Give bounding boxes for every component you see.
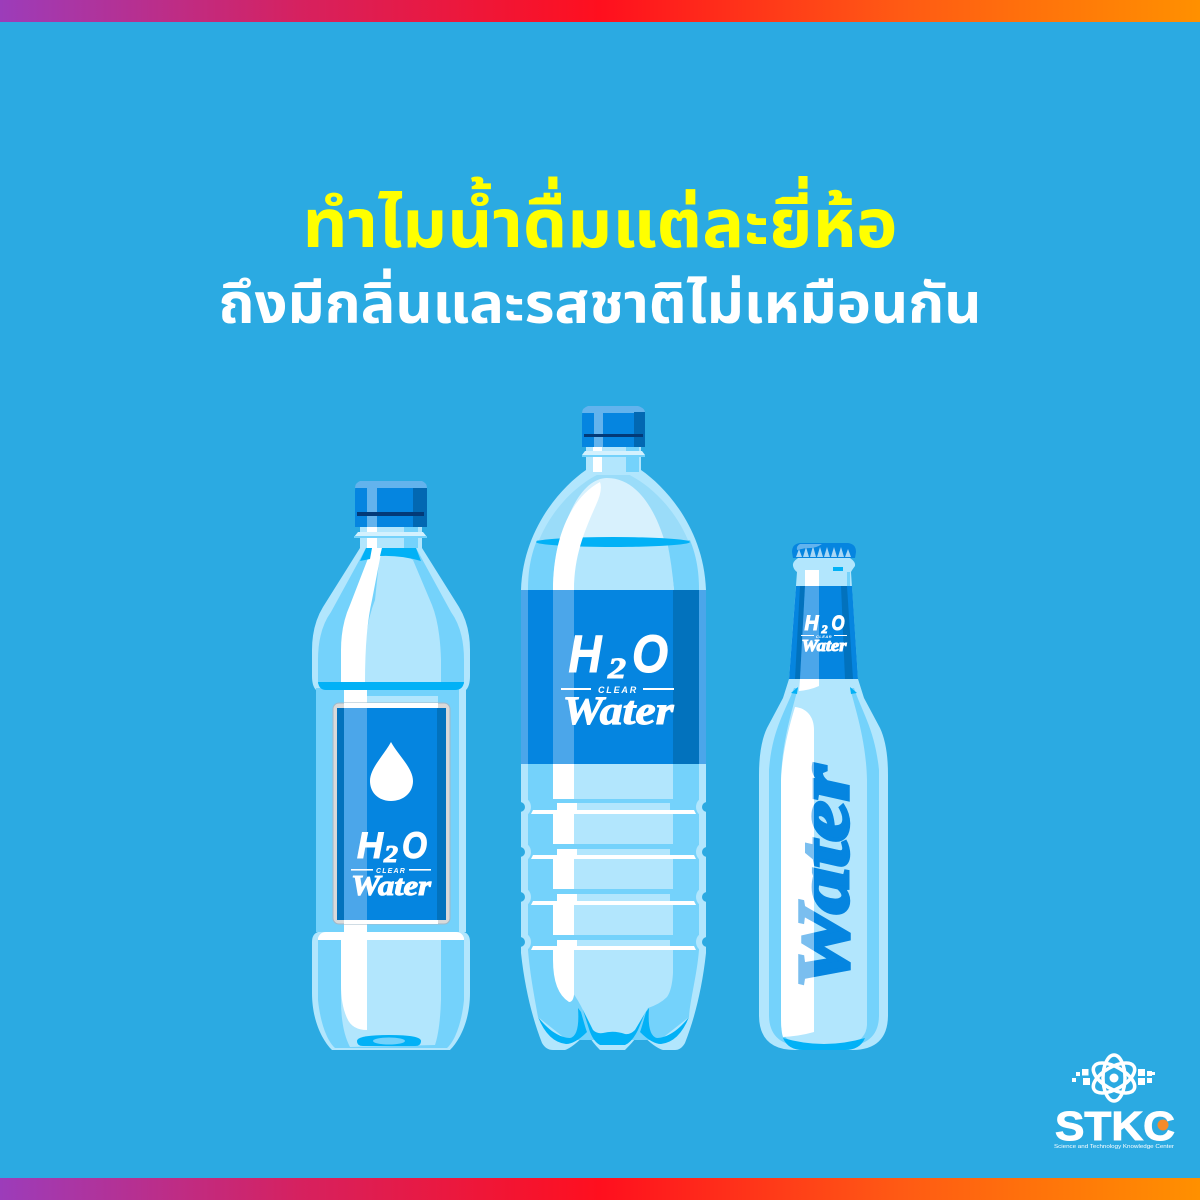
bottle 3 neck top bbox=[797, 570, 851, 586]
bottle 1 body bbox=[312, 538, 470, 1050]
bottle 2 highlight bbox=[553, 482, 601, 590]
title line 1: ทำไมน้ำดื่มแต่ละยี่ห้อ bbox=[302, 176, 898, 262]
bottle 2 cap bbox=[582, 406, 645, 447]
logo: STKC bbox=[1054, 1055, 1175, 1150]
H2O text bbox=[357, 825, 427, 868]
H2O text: H bbox=[357, 825, 384, 866]
H2O text: H bbox=[804, 612, 819, 635]
title line 2: ถึงมีกลิ่นและรสชาติไม่เหมือนกัน bbox=[218, 267, 982, 335]
title bbox=[218, 176, 982, 335]
bottle 3 body bbox=[759, 572, 888, 1050]
bottle 1 label bbox=[333, 703, 450, 924]
bottle 2 rib stripes bbox=[531, 810, 696, 950]
bottle 2 feet water bbox=[538, 1008, 689, 1045]
bottle 2 neck and collar bbox=[586, 447, 641, 475]
bottle 3 crown cap bbox=[792, 543, 856, 558]
bottle 2 label: Water bbox=[562, 688, 674, 733]
bottle 2 rib bumps bbox=[521, 797, 706, 952]
logo pixel squares bbox=[1072, 1069, 1155, 1085]
bottle 1: drop label bbox=[312, 481, 470, 1050]
bottle 1 cap bbox=[355, 481, 427, 527]
H2O text: 2 bbox=[383, 842, 398, 868]
logo atom icon bbox=[1089, 1055, 1139, 1101]
bottle 2 dome bbox=[528, 468, 699, 590]
bottle 3 highlight bbox=[781, 707, 814, 1037]
H2O text: O bbox=[402, 825, 427, 866]
bottle 2 body bbox=[521, 470, 706, 1050]
H2O text: 2 bbox=[607, 652, 626, 685]
H2O text: O bbox=[832, 612, 844, 635]
bottle 1 water line bbox=[318, 682, 464, 690]
bottle 1 label: CLEAR bbox=[376, 868, 406, 875]
H2O text: O bbox=[632, 625, 668, 684]
bottle 1 neck and collar bbox=[360, 527, 422, 548]
bottle 3 neck label: CLEAR bbox=[816, 634, 832, 639]
bottle 2 inner water bbox=[553, 478, 674, 590]
H2O text bbox=[568, 625, 668, 685]
H2O text: H bbox=[568, 625, 603, 684]
bottle 1 label: Water bbox=[351, 870, 432, 902]
bottle 3 water bbox=[783, 1038, 865, 1050]
bottle 3 neck label bbox=[789, 586, 858, 679]
bottle 3 lip bbox=[793, 558, 855, 572]
H2O text: 2 bbox=[820, 622, 828, 636]
bottom gradient bar bbox=[0, 1178, 1200, 1200]
top gradient bar bbox=[0, 0, 1200, 22]
H2O text bbox=[804, 612, 844, 636]
bottle 3 vertical Water text: Water bbox=[783, 764, 864, 989]
logo tagline: Science and Technology Knowledge Center bbox=[1054, 1144, 1174, 1150]
bottle 1 inner water bbox=[365, 552, 441, 682]
bottle 2 label bbox=[521, 590, 706, 764]
bottle 2: large bottle bbox=[520, 406, 707, 1050]
icon: water drop bbox=[370, 742, 413, 801]
bottle 1 base band bbox=[318, 932, 464, 940]
logo orange dot bbox=[1158, 1120, 1168, 1130]
bottle 3: glass bottle bbox=[759, 543, 888, 1050]
bottle 3 neck label: Water bbox=[802, 636, 847, 655]
bottle 1 base ellipse bbox=[357, 1035, 421, 1046]
bottle 2 notch cuts bbox=[520, 802, 707, 947]
logo wordmark: STKC bbox=[1055, 1103, 1175, 1149]
bottle 2 label: CLEAR bbox=[598, 685, 638, 695]
bottle 1 highlight bbox=[341, 548, 382, 682]
